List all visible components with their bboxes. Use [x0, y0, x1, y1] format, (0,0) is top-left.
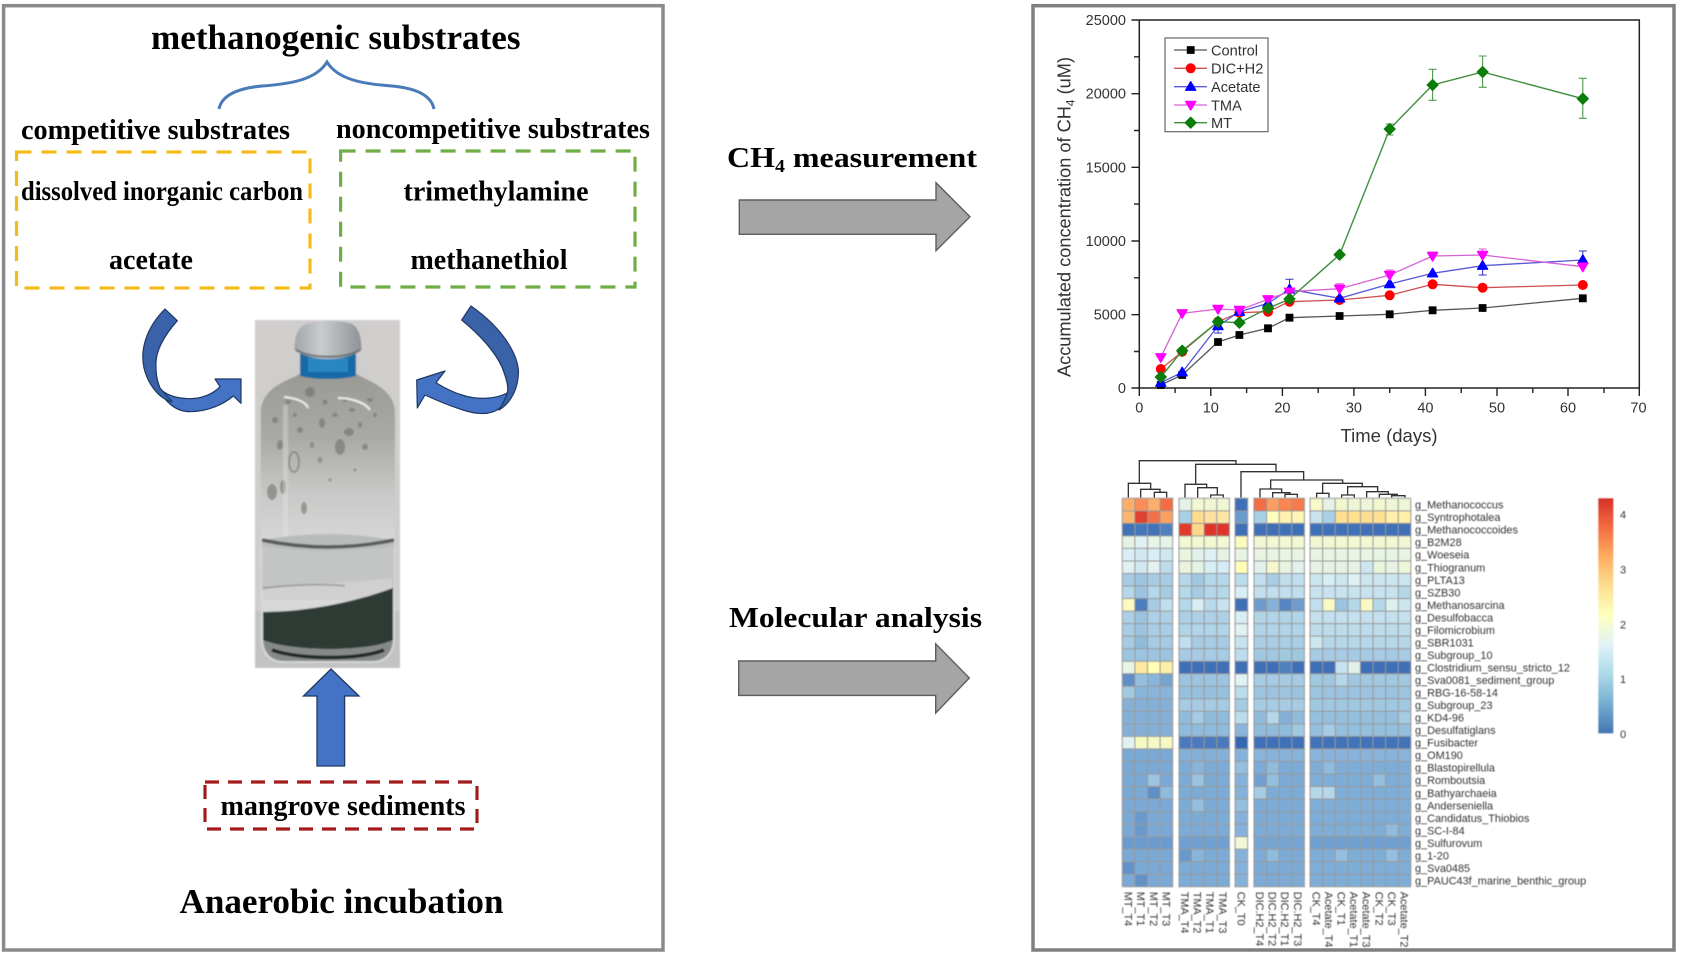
label: CH4 measurement: 4	[775, 156, 785, 176]
heatmap row labels: g_SZB30	[1415, 587, 1460, 599]
heatmap row labels: g_Bathyarchaeia	[1415, 788, 1498, 800]
heatmap row labels: g_Sva0485	[1415, 863, 1470, 875]
heatmap row labels: g_Methanococcus	[1415, 500, 1504, 512]
sediment	[263, 588, 393, 649]
heatmap row labels: g_Methanococcoides	[1415, 525, 1518, 537]
colour scale bar: 3	[1620, 564, 1626, 576]
heading: noncompetitive substrates: noncompetitive substrates	[336, 114, 650, 145]
series: DIC+H2	[1156, 279, 1588, 374]
heatmap column labels: CK_T2	[1372, 892, 1384, 926]
y axis title: (uM)	[1054, 57, 1074, 99]
gas headspace stains	[267, 387, 377, 514]
line chart: accumulated CH4	[1054, 13, 1647, 446]
dendrogram	[1128, 461, 1405, 498]
chart legend	[1165, 38, 1268, 132]
heatmap column labels: Acetate_T1	[1347, 892, 1359, 947]
y axis tick labels: 25000	[1086, 13, 1126, 29]
heatmap column labels: MT_T2	[1147, 892, 1159, 926]
label: CH4 measurement: CH	[727, 142, 770, 174]
x axis tick labels	[1135, 401, 1647, 417]
x axis tick labels: 20	[1274, 401, 1290, 417]
heatmap row labels: g_Filomicrobium	[1415, 625, 1495, 637]
y axis title: Accumulated concentration of CH	[1054, 109, 1074, 377]
colour scale bar	[1598, 498, 1626, 741]
heatmap row labels: g_Sva0081_sediment_group	[1415, 675, 1554, 687]
colour scale bar: 1	[1620, 674, 1626, 686]
heatmap column labels: MT_T4	[1122, 892, 1134, 926]
panel: anaerobic incubation	[4, 6, 663, 950]
heatmap row labels: g_Fusibacter	[1415, 738, 1478, 750]
series: Control	[1158, 295, 1586, 388]
rows 20 to 30	[1122, 749, 1411, 887]
x axis tick labels: 0	[1135, 401, 1143, 417]
chart legend: Control	[1211, 43, 1258, 59]
heatmap row labels: g_OM190	[1415, 750, 1463, 762]
heatmap row labels: g_PLTA13	[1415, 575, 1465, 587]
panel: measurements	[1033, 6, 1674, 950]
heatmap column labels: CK_T1	[1334, 892, 1346, 926]
metal cap	[294, 321, 362, 359]
heatmap row labels: g_PAUC43f_marine_benthic_group	[1415, 876, 1586, 888]
icon: left curved arrow	[143, 309, 241, 412]
heatmap column labels: DIC.H2_T3	[1291, 892, 1303, 946]
heatmap cells	[1122, 497, 1411, 888]
icon: right curved arrow	[417, 306, 518, 414]
series: Acetate	[1156, 251, 1588, 386]
text: acetate: acetate	[109, 245, 193, 276]
heatmap column labels: DIC.H2_T4	[1253, 892, 1265, 946]
arrow: to heatmap	[739, 644, 969, 713]
box: mangrove sediments	[205, 782, 477, 829]
heatmap column labels: Acetate_T4	[1322, 892, 1334, 947]
x axis tick labels: 70	[1630, 401, 1647, 417]
chart legend: TMA	[1211, 98, 1242, 114]
heatmap row labels: g_Thiogranum	[1415, 562, 1485, 574]
label: Molecular analysis: Molecular analysis	[729, 602, 982, 634]
heatmap column labels: DIC.H2_T1	[1278, 892, 1290, 946]
heatmap column labels: MT_T3	[1159, 892, 1171, 926]
heatmap column labels: TMA_T1	[1203, 892, 1215, 933]
heading: methanogenic substrates: methanogenic substrates	[151, 19, 520, 57]
icon: up arrow	[304, 669, 359, 766]
colour scale bar: 0	[1620, 729, 1626, 741]
rows 9 to 12	[1122, 611, 1411, 661]
row 0 to 2	[1122, 498, 1411, 536]
heatmap row labels: g_Syntrophotalea	[1415, 512, 1501, 524]
text: methanethiol: methanethiol	[410, 245, 568, 276]
y axis tick labels: 0	[1118, 381, 1126, 397]
heatmap row labels: g_Anderseniella	[1415, 800, 1494, 812]
box: noncompetitive substrates	[341, 151, 635, 287]
heatmap column labels: CK_T3	[1385, 892, 1397, 926]
heatmap grid	[1122, 498, 1411, 887]
heatmap row labels: g_Desulfobacca	[1415, 612, 1494, 624]
chart legend: DIC+H2	[1211, 62, 1263, 78]
chart legend: Acetate	[1211, 80, 1260, 96]
rows 13 to 15	[1122, 661, 1411, 699]
colour scale bar: 4	[1620, 509, 1626, 521]
chart axes frame	[1132, 20, 1639, 396]
heatmap row labels: g_Blastopirellula	[1415, 763, 1496, 775]
y axis tick labels: 20000	[1086, 87, 1126, 103]
heatmap column labels: DIC.H2_T2	[1266, 892, 1278, 946]
rows 16 to 19	[1122, 699, 1411, 749]
icon: photo of serum bottle	[255, 320, 400, 668]
heading: competitive substrates: competitive substrates	[21, 115, 290, 146]
blue crimp	[300, 350, 356, 379]
x axis tick labels: 10	[1203, 401, 1219, 417]
heatmap row labels	[1415, 500, 1586, 888]
y axis title: 4	[1064, 99, 1078, 106]
rows 3 to 5	[1122, 536, 1411, 573]
bottle body	[261, 374, 395, 663]
heatmap column labels: MT_T1	[1134, 892, 1146, 926]
heatmap column labels: Acetate_T2	[1398, 892, 1410, 947]
heatmap row labels: g_SBR1031	[1415, 637, 1474, 649]
heatmap row labels: g_RBG-16-58-14	[1415, 688, 1498, 700]
x axis tick labels: 60	[1560, 401, 1576, 417]
heatmap column labels: Acetate_T3	[1360, 892, 1372, 947]
x axis tick labels: 50	[1489, 401, 1505, 417]
arrow: to CH4 chart	[739, 183, 970, 251]
heading: anaerobic incubation: Anaerobic incubation	[180, 882, 504, 921]
y axis tick labels	[1086, 13, 1126, 397]
brace	[219, 62, 434, 109]
heatmap row labels: g_Subgroup_10	[1415, 650, 1493, 662]
y axis tick labels: 5000	[1094, 308, 1126, 324]
heatmap row labels: g_Desulfatiglans	[1415, 725, 1496, 737]
heatmap row labels: g_Romboutsia	[1415, 775, 1486, 787]
heatmap	[1122, 497, 1626, 947]
heatmap row labels: g_Clostridium_sensu_stricto_12	[1415, 662, 1570, 674]
heatmap row labels: g_KD4-96	[1415, 713, 1464, 725]
series: MT	[1155, 56, 1588, 382]
series: TMA	[1156, 249, 1588, 362]
colour scale bar: 2	[1620, 619, 1626, 631]
heatmap row labels: g_Woeseia	[1415, 550, 1470, 562]
heatmap column labels: CK_T0	[1234, 892, 1246, 926]
heatmap row labels: g_B2M28	[1415, 537, 1462, 549]
text: trimethylamine: trimethylamine	[404, 176, 588, 208]
x axis tick labels: 30	[1346, 401, 1362, 417]
heatmap column labels: TMA_T3	[1216, 892, 1228, 933]
y axis tick labels: 10000	[1086, 234, 1126, 250]
heatmap column labels: TMA_T4	[1178, 892, 1190, 933]
rows 6 to 8	[1122, 573, 1411, 611]
x axis title: Time (days)	[1340, 426, 1438, 446]
heatmap column labels: TMA_T2	[1191, 892, 1203, 933]
text: dissolved inorganic carbon: dissolved inorganic carbon	[21, 176, 303, 206]
heatmap row labels: g_Sulfurovum	[1415, 838, 1482, 850]
chart legend: MT	[1211, 116, 1232, 132]
heatmap row labels: g_Methanosarcina	[1415, 600, 1506, 612]
heatmap column labels: CK_T4	[1309, 892, 1321, 926]
heatmap row labels: g_Subgroup_23	[1415, 700, 1493, 712]
heatmap column labels	[1122, 892, 1410, 947]
y axis tick labels: 15000	[1086, 160, 1126, 176]
liquid	[262, 534, 394, 590]
x axis tick labels: 40	[1417, 401, 1433, 417]
box: competitive substrates	[16, 152, 310, 288]
heatmap row labels: g_Candidatus_Thiobios	[1415, 813, 1530, 825]
heatmap row labels: g_1-20	[1415, 850, 1449, 862]
heatmap row labels: g_SC-I-84	[1415, 825, 1465, 837]
text: mangrove sediments: mangrove sediments	[220, 791, 466, 822]
label: CH4 measurement: measurement	[785, 142, 977, 174]
